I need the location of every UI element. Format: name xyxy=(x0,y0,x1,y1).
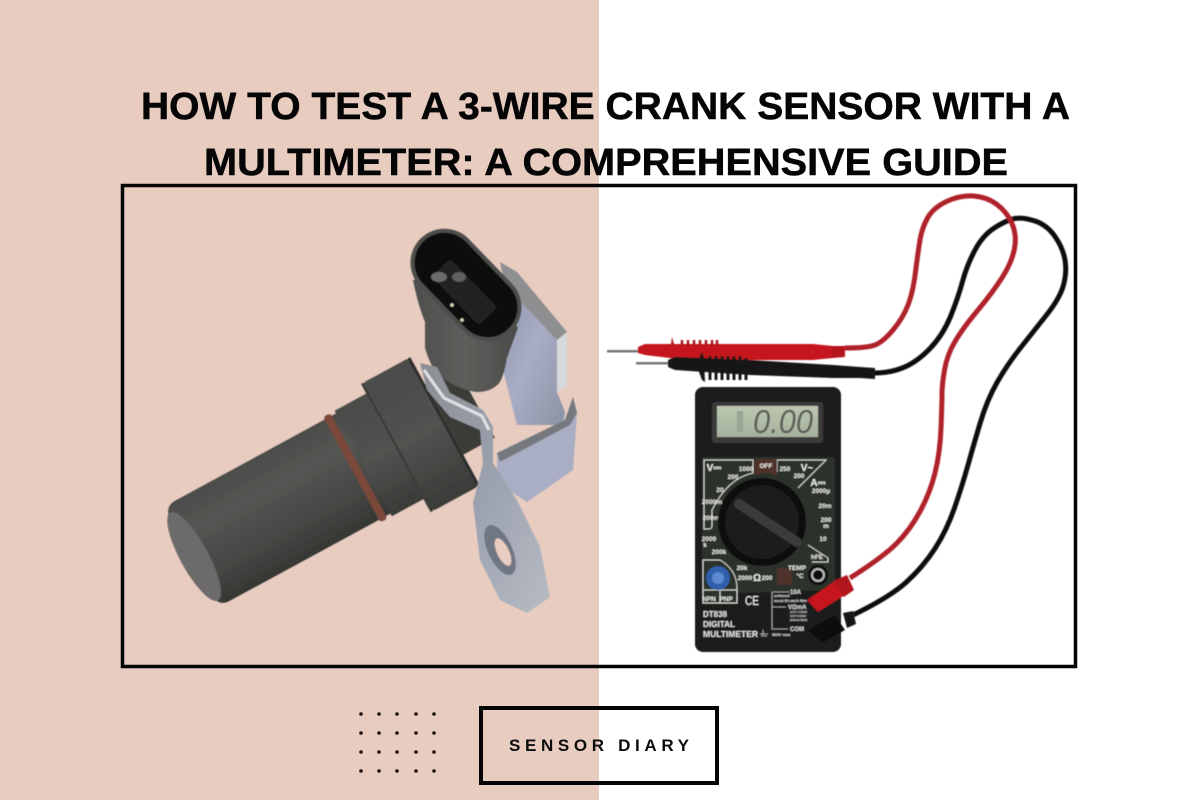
title: MULTIMETER: A COMPREHENSIVE GUIDE xyxy=(204,142,1008,184)
range labels xyxy=(702,463,832,603)
black lead wire xyxy=(853,218,1066,615)
range labels: 2000m xyxy=(702,499,722,506)
range labels: 2000 xyxy=(738,575,753,582)
range labels: OFF xyxy=(760,463,773,470)
range labels: 20 xyxy=(716,487,724,494)
background: pink left half xyxy=(0,0,599,800)
jack labels: must fit each film xyxy=(774,598,807,603)
range labels: 20m xyxy=(818,503,832,510)
illustration: test leads xyxy=(607,196,1066,615)
dial panel xyxy=(702,457,835,604)
front strap with slot xyxy=(420,363,550,613)
connector opening xyxy=(396,215,536,355)
model text: MULTIMETER xyxy=(703,629,758,639)
rubber o-ring xyxy=(323,413,387,522)
brand name: SENSOR DIARY xyxy=(509,736,690,755)
jack labels: CAT II 600V xyxy=(790,614,806,618)
range labels: m xyxy=(823,523,829,530)
black plug xyxy=(808,611,856,643)
range labels: 200 xyxy=(728,474,739,481)
range labels: hFE xyxy=(811,554,824,561)
range labels: °C xyxy=(796,572,804,580)
title xyxy=(141,86,1070,184)
sensor barrel, ring and collar xyxy=(147,340,512,628)
jack labels: VΩmA xyxy=(788,605,807,611)
jack labels: 10A xyxy=(790,590,802,596)
red plug xyxy=(807,575,854,612)
range labels: 200 xyxy=(821,517,832,524)
model text: DT838 xyxy=(703,609,727,619)
jack labels: 250mA MAX xyxy=(790,618,807,622)
jack labels xyxy=(772,590,807,637)
model text xyxy=(703,609,758,639)
range labels: V~ xyxy=(801,463,813,474)
jack labels: unfused xyxy=(774,593,790,598)
jack labels: COM xyxy=(790,627,804,633)
range labels: V⎓ xyxy=(707,463,721,474)
red lead wire xyxy=(845,196,1015,578)
range labels: A⎓ xyxy=(810,478,826,489)
flat end face xyxy=(158,506,230,607)
range labels: 1000 xyxy=(739,466,754,473)
title: HOW TO TEST A 3-WIRE CRANK SENSOR WITH A xyxy=(141,86,1070,128)
range labels: 200 xyxy=(794,473,805,480)
off and ohm red marks xyxy=(755,459,792,585)
jack wiring lines xyxy=(760,592,790,636)
meter body xyxy=(695,387,841,652)
lcd screen with reading xyxy=(717,403,818,440)
rotary dial xyxy=(718,478,806,566)
range labels: TEMP xyxy=(788,565,807,572)
lcd bezel xyxy=(712,402,823,443)
rear bracket plate xyxy=(497,262,577,502)
black probe xyxy=(636,352,875,382)
range labels: k xyxy=(703,542,707,549)
range labels: 20k xyxy=(737,565,748,572)
model text: DIGITAL xyxy=(703,619,735,629)
ce mark: CE xyxy=(745,593,759,608)
illustration: digital multimeter xyxy=(695,387,856,652)
input jack xyxy=(808,565,828,585)
range labels: Ω xyxy=(753,573,761,584)
brand box xyxy=(481,708,717,783)
range labels: NPN xyxy=(702,596,716,603)
range outlines xyxy=(703,460,828,603)
decorative dot grid xyxy=(359,712,436,773)
main image frame xyxy=(122,186,1076,666)
lcd screen with reading: 0.00 xyxy=(753,403,814,440)
range labels: 200m xyxy=(703,515,720,522)
jack labels: 500V max xyxy=(772,632,791,637)
transistor socket xyxy=(706,566,730,590)
range labels: 200 xyxy=(762,575,773,582)
illustration: crank sensor xyxy=(147,215,577,628)
range labels: PNP xyxy=(719,596,733,603)
range labels: 2000µ xyxy=(812,488,830,495)
range labels: 250 xyxy=(780,466,791,473)
range labels: 2000 xyxy=(702,536,717,543)
red probe xyxy=(607,337,845,360)
range labels: 10 xyxy=(819,536,827,543)
range labels: 200k xyxy=(712,549,727,556)
jack labels: CAT I 1000V xyxy=(790,610,807,614)
connector body xyxy=(413,270,518,392)
